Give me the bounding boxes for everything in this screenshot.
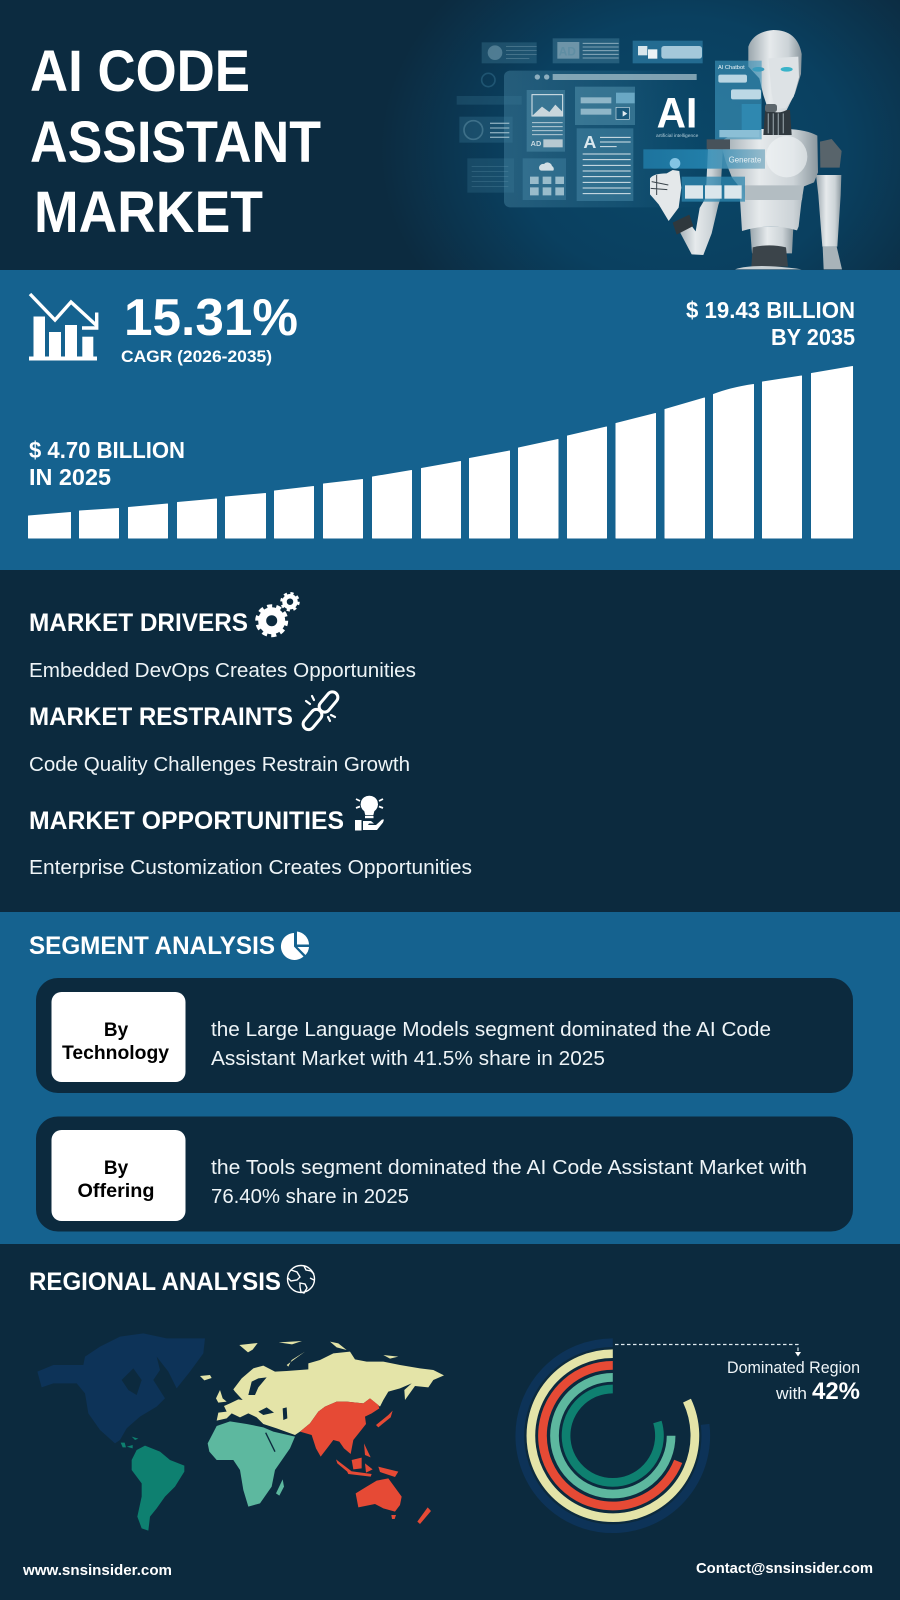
- heading: segment analysis: SEGMENT ANALYSIS: [29, 932, 275, 960]
- interface overlays: artificial intelligence: [656, 133, 699, 138]
- text: offering segment: the Tools segment dominated the AI Code Assistant Market with: [211, 1157, 807, 1179]
- end value label: [686, 297, 855, 350]
- robot left arm and hand: [650, 139, 730, 255]
- text: opportunity: Enterprise Customization Creates Opportunities: [29, 857, 472, 879]
- end value label: $ 19.43 BILLION: [686, 297, 855, 323]
- title: MARKET: [34, 180, 263, 245]
- caribbean: [121, 1437, 138, 1448]
- start value label: IN 2025: [29, 464, 111, 490]
- icon: globe: [288, 1266, 314, 1293]
- text: driver: Embedded DevOps Creates Opportunities: [29, 660, 416, 682]
- north america: [37, 1333, 205, 1443]
- interface overlays: AI: [657, 89, 697, 137]
- asia pacific: [300, 1398, 379, 1457]
- hero illustration: robot with AI interface: [0, 0, 900, 270]
- south america: [132, 1446, 184, 1531]
- africa and arabia: [208, 1421, 295, 1507]
- robot body: [720, 129, 818, 269]
- heading: market drivers: MARKET DRIVERS: [29, 609, 248, 637]
- browser panel: AD: [531, 139, 541, 148]
- eurasia: [217, 1352, 444, 1435]
- heading: market opportunities: MARKET OPPORTUNITIES: [29, 807, 344, 835]
- panel: market size and growth: [0, 270, 900, 570]
- world map: [37, 1333, 444, 1531]
- title: [30, 39, 321, 245]
- southeast asian islands: [336, 1443, 398, 1477]
- interface overlays: [643, 61, 793, 202]
- title: ASSISTANT: [30, 110, 321, 175]
- floating tiles: [457, 38, 703, 193]
- title: AI CODE: [30, 39, 250, 104]
- card: by technology: [36, 978, 853, 1093]
- label box: by offering: By: [104, 1158, 129, 1179]
- madagascar: [276, 1479, 284, 1496]
- panel: header: [0, 0, 900, 270]
- browser panel: A: [583, 132, 596, 152]
- panel: market dynamics: [0, 570, 900, 912]
- red sea: [266, 1433, 275, 1452]
- icon: gears: [257, 593, 298, 635]
- start value label: [29, 437, 185, 490]
- icon: pie chart: [281, 932, 309, 960]
- robot right arm: [816, 139, 842, 269]
- radial bar chart: [520, 1343, 706, 1529]
- text: technology segment: Assistant Market with 41.5% share in 2025: [211, 1048, 605, 1070]
- end value label: BY 2035: [771, 324, 855, 350]
- new zealand: [417, 1507, 431, 1524]
- label box: by offering: Offering: [78, 1181, 154, 1202]
- text: restraint: Code Quality Challenges Restrain Growth: [29, 754, 410, 776]
- start value label: $ 4.70 BILLION: [29, 437, 185, 463]
- robot head: [748, 30, 802, 135]
- callout: dominated region: [727, 1359, 860, 1405]
- CAGR value: 15.31%: [124, 289, 298, 347]
- australia: [356, 1478, 402, 1519]
- footer: website: www.snsinsider.com: [22, 1562, 172, 1579]
- arrow: dashed leader: [615, 1344, 801, 1356]
- heading: regional analysis: REGIONAL ANALYSIS: [29, 1268, 281, 1296]
- bar chart: [28, 366, 852, 538]
- floating tiles: AD: [559, 44, 576, 58]
- text: technology segment: [211, 1019, 771, 1070]
- panel: regional analysis: [0, 1244, 900, 1600]
- text: technology segment: the Large Language Models segment dominated the AI Code: [211, 1019, 771, 1041]
- CAGR label: CAGR (2026-2035): [121, 347, 272, 366]
- text: offering segment: [211, 1157, 807, 1208]
- interface overlays: Generate: [729, 154, 761, 164]
- browser panel: [504, 71, 704, 207]
- japan: [376, 1411, 393, 1427]
- black sea and caspian: [258, 1407, 287, 1420]
- hudson bay: [122, 1368, 142, 1395]
- icon: growth chart: [29, 294, 97, 360]
- text: offering segment: 76.40% share in 2025: [211, 1186, 409, 1208]
- heading: market restraints: MARKET RESTRAINTS: [29, 703, 293, 731]
- icon: bulb in hand: [355, 792, 384, 830]
- label box: by technology: By: [104, 1020, 129, 1041]
- label box: by offering: [52, 1130, 186, 1221]
- baltic sea: [248, 1377, 267, 1395]
- interface overlays: AI Chatbot: [718, 65, 745, 71]
- northern islands: [200, 1341, 398, 1403]
- label box: by technology: [52, 992, 186, 1082]
- callout: dominated region: Dominated Region: [727, 1359, 860, 1377]
- callout: dominated region: with: [775, 1385, 807, 1403]
- panel: segment analysis: [0, 912, 900, 1244]
- callout: dominated region: 42%: [812, 1378, 860, 1405]
- label box: by technology: Technology: [62, 1043, 169, 1064]
- icon: broken chain: [301, 690, 340, 732]
- footer: contact: Contact@snsinsider.com: [696, 1560, 873, 1577]
- card: by offering: [36, 1116, 853, 1232]
